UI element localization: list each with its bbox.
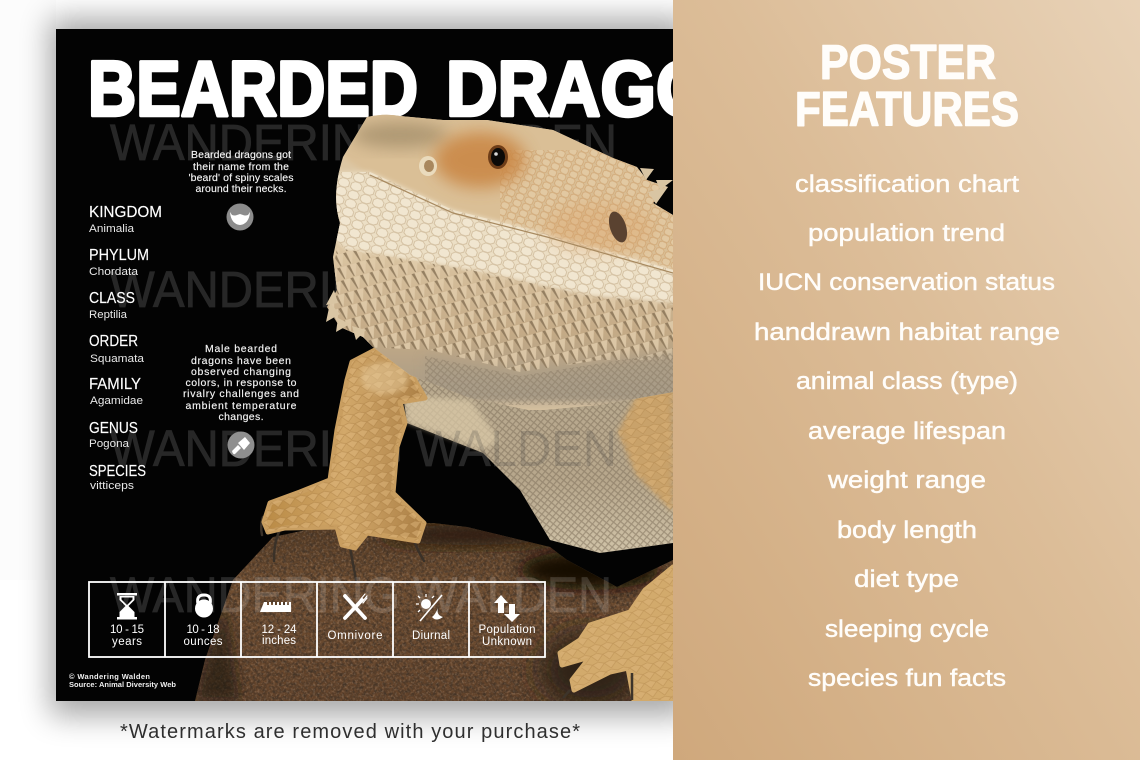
activity stat: Diurnal bbox=[412, 630, 450, 642]
population stat: Population bbox=[478, 624, 536, 636]
phylum: PHYLUM bbox=[89, 247, 149, 264]
fun fact: colour change: Male bearded bbox=[205, 343, 277, 355]
fun fact: colour change: observed changing bbox=[191, 366, 291, 378]
lifespan stat: years bbox=[112, 636, 142, 648]
features list: animal class (type) bbox=[796, 368, 1018, 395]
features list: body length bbox=[837, 517, 977, 544]
order bbox=[89, 333, 145, 365]
panel: poster features bbox=[673, 0, 1140, 760]
length stat bbox=[262, 624, 297, 647]
illustration: rock bbox=[190, 520, 680, 708]
features list: diet type bbox=[854, 566, 959, 593]
fun fact: colour change: rivalry challenges and bbox=[183, 388, 299, 400]
illustration: bearded dragon bbox=[261, 110, 680, 700]
species: SPECIES bbox=[89, 463, 146, 480]
watermark over the stats row: WANDERING WALDEN bbox=[110, 567, 612, 623]
features list: species fun facts bbox=[808, 665, 1006, 692]
panel: poster artwork bbox=[56, 29, 673, 701]
icon: sun and moon bbox=[416, 594, 443, 621]
dragon eye bbox=[488, 145, 508, 169]
credits: Source: Animal Diversity Web bbox=[69, 680, 176, 689]
lifespan stat bbox=[110, 624, 144, 648]
watermark rows behind the dragon: WANDERING WALDEN bbox=[110, 114, 617, 171]
credits: © Wandering Walden bbox=[69, 672, 150, 681]
dragon claws bbox=[261, 517, 424, 580]
fun fact: colour change: ambient temperature bbox=[186, 400, 297, 412]
dragon front leg bbox=[264, 350, 425, 548]
features list: weight range bbox=[827, 467, 986, 494]
icon: ruler bbox=[260, 602, 291, 612]
features list: classification chart bbox=[795, 171, 1019, 198]
stats strip bbox=[89, 582, 545, 657]
icon: paint brush bbox=[228, 432, 254, 458]
class bbox=[89, 290, 135, 321]
features list: sleeping cycle bbox=[825, 616, 989, 643]
phylum bbox=[90, 248, 148, 275]
dragon belly bbox=[400, 370, 673, 553]
dragon nostril bbox=[419, 156, 437, 176]
genus: GENUS bbox=[89, 420, 138, 437]
fun fact: beard: around their necks. bbox=[196, 183, 286, 195]
watermark rows behind the dragon: WANDERING WALDEN bbox=[110, 420, 617, 477]
cream jaw scales bbox=[325, 172, 673, 305]
title: DRAGON bbox=[446, 44, 763, 132]
phylum: Chordata bbox=[89, 266, 139, 278]
heading: FEATURES bbox=[795, 84, 1019, 136]
mouth line bbox=[370, 175, 673, 273]
genus bbox=[89, 420, 138, 450]
fun fact: beard: Bearded dragons got bbox=[191, 149, 291, 161]
fun fact: colour change: dragons have been bbox=[191, 355, 291, 367]
heading: POSTER bbox=[820, 36, 996, 90]
family bbox=[89, 376, 143, 407]
poster black background bbox=[56, 29, 673, 701]
dragon head and beard bbox=[320, 110, 680, 410]
kingdom bbox=[89, 206, 161, 232]
features list: average lifespan bbox=[808, 418, 1006, 445]
fun fact: colour change bbox=[183, 343, 299, 423]
watermark rows behind the dragon bbox=[110, 114, 617, 477]
icon: kettlebell bbox=[195, 595, 213, 618]
weight stat: ounces bbox=[184, 636, 223, 648]
skull shading bbox=[352, 122, 448, 148]
kingdom: KINGDOM bbox=[89, 204, 162, 221]
features list: population trend bbox=[808, 220, 1005, 247]
fun fact: beard: 'beard' of spiny scales bbox=[188, 172, 294, 184]
icon: up and down arrows bbox=[494, 595, 520, 622]
diet stat: Omnivore bbox=[328, 630, 382, 642]
length stat: inches bbox=[262, 635, 296, 647]
watermark over the belly: WANDERING WALDEN bbox=[110, 420, 617, 477]
features list: IUCN conservation status bbox=[758, 269, 1055, 296]
species: vitticeps bbox=[90, 480, 135, 492]
features list: handdrawn habitat range bbox=[754, 319, 1060, 346]
credits bbox=[69, 672, 176, 689]
fun fact: colour change: changes. bbox=[218, 411, 264, 423]
features list bbox=[754, 171, 1060, 692]
title bbox=[90, 59, 673, 118]
taxonomy list bbox=[89, 204, 162, 492]
grey neck scales bbox=[476, 350, 672, 410]
heading bbox=[795, 36, 1019, 136]
fun fact: colour change: colors, in response to bbox=[186, 377, 297, 389]
icon: hourglass bbox=[117, 593, 137, 620]
length stat: 12 - 24 bbox=[262, 624, 297, 636]
poster drop shadow bbox=[0, 0, 690, 716]
upper skull tone bbox=[343, 110, 680, 272]
order: Squamata bbox=[90, 353, 145, 365]
family: Agamidae bbox=[90, 395, 143, 407]
weight stat bbox=[184, 624, 223, 648]
watermark rows behind the dragon: WANDERING WALDEN bbox=[110, 261, 617, 318]
family: FAMILY bbox=[89, 376, 141, 393]
dragon ear bbox=[608, 212, 628, 242]
fun fact: beard: their name from the bbox=[193, 161, 289, 173]
population stat bbox=[478, 624, 536, 648]
watermark removal note: *Watermarks are removed with your purchase* bbox=[120, 721, 580, 743]
class: Reptilia bbox=[89, 309, 128, 321]
dragon rear shoulder bbox=[618, 378, 673, 512]
kingdom: Animalia bbox=[89, 223, 135, 235]
weight stat: 10 - 18 bbox=[186, 624, 220, 636]
icon: fork and knife bbox=[345, 594, 367, 618]
title: BEARDED bbox=[88, 44, 418, 132]
beard edge spikes bbox=[326, 168, 673, 340]
genus: Pogona bbox=[89, 438, 130, 450]
fun fact: beard bbox=[188, 149, 294, 195]
species bbox=[89, 463, 146, 492]
population stat: Unknown bbox=[482, 636, 532, 648]
belly highlight near arm bbox=[405, 395, 500, 450]
icon: beard bbox=[226, 204, 254, 230]
beard base and spikes bbox=[320, 248, 680, 400]
dragon rear foot bbox=[560, 567, 673, 700]
lifespan stat: 10 - 15 bbox=[110, 624, 144, 636]
class: CLASS bbox=[89, 290, 135, 307]
order: ORDER bbox=[89, 333, 138, 350]
